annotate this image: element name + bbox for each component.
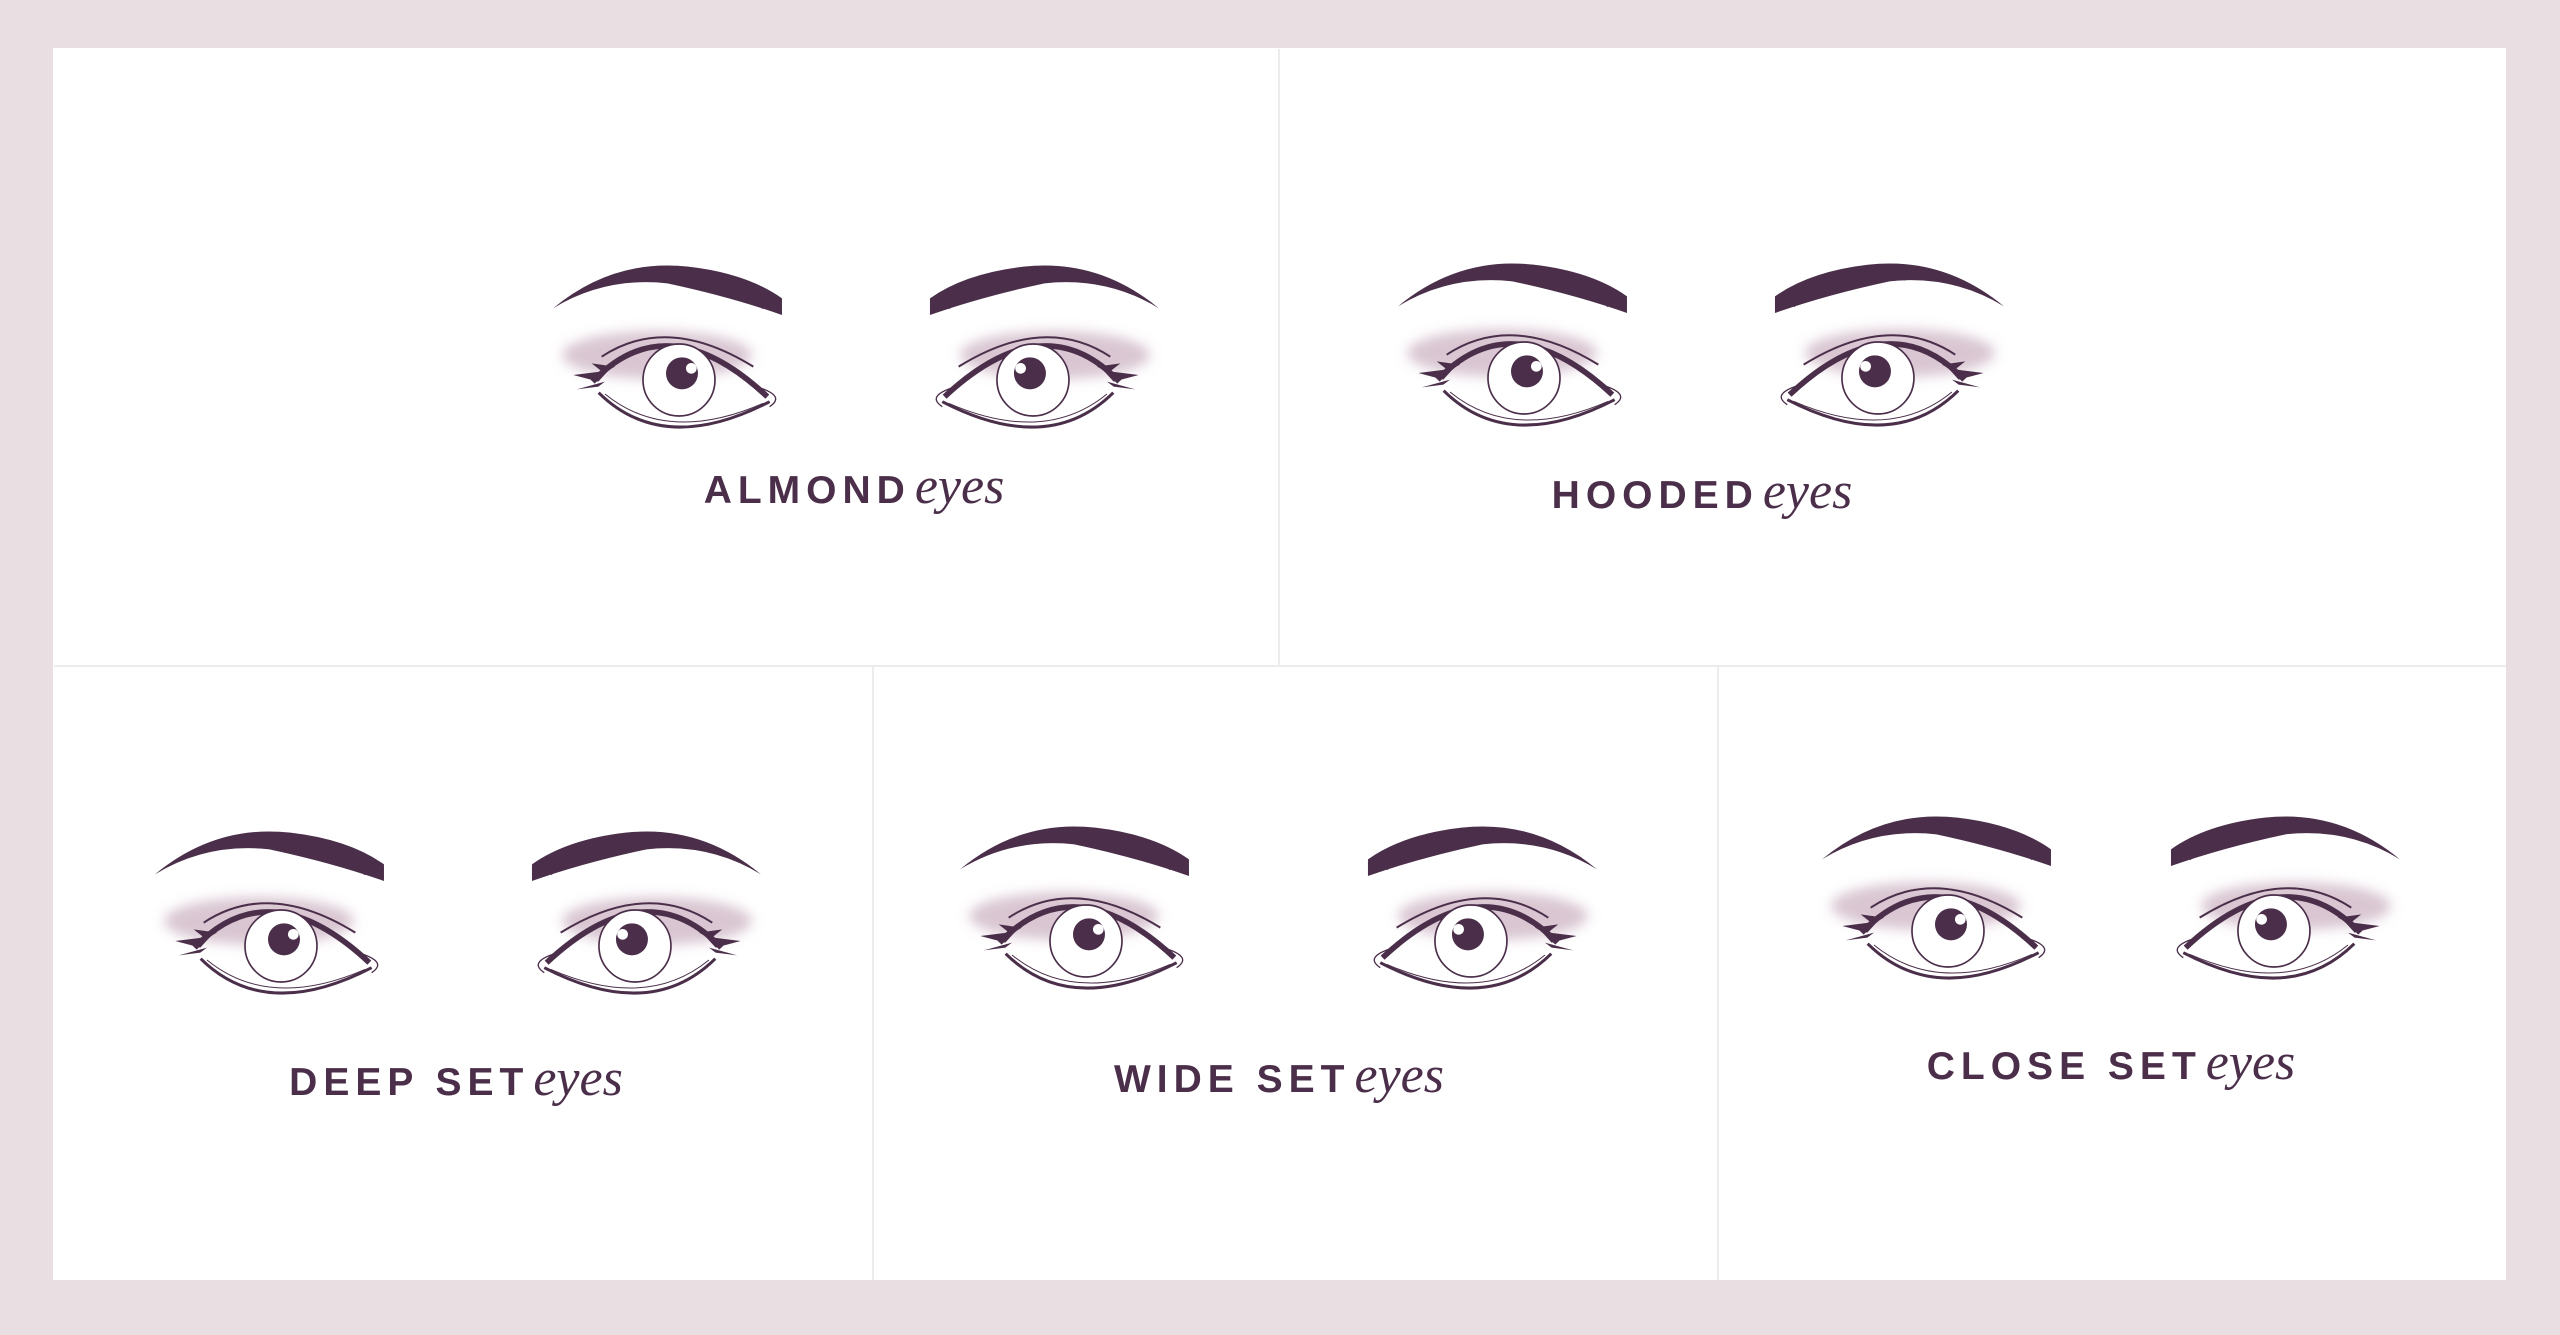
label: hooded: HOODEDeyes xyxy=(1552,463,1852,520)
label: almond: ALMONDeyes xyxy=(704,458,1004,515)
illustration: close set eyes xyxy=(1822,816,2400,978)
label: close set: CLOSE SETeyes xyxy=(1927,1034,2295,1091)
illustration: deep set eyes xyxy=(155,831,761,993)
label: wide set: WIDE SETeyes xyxy=(1114,1047,1444,1104)
illustration: wide set eyes xyxy=(960,826,1597,988)
label: deep set: DEEP SETeyes xyxy=(289,1050,623,1107)
illustration: hooded eyes xyxy=(1398,263,2004,425)
illustration: almond eyes xyxy=(553,265,1159,427)
